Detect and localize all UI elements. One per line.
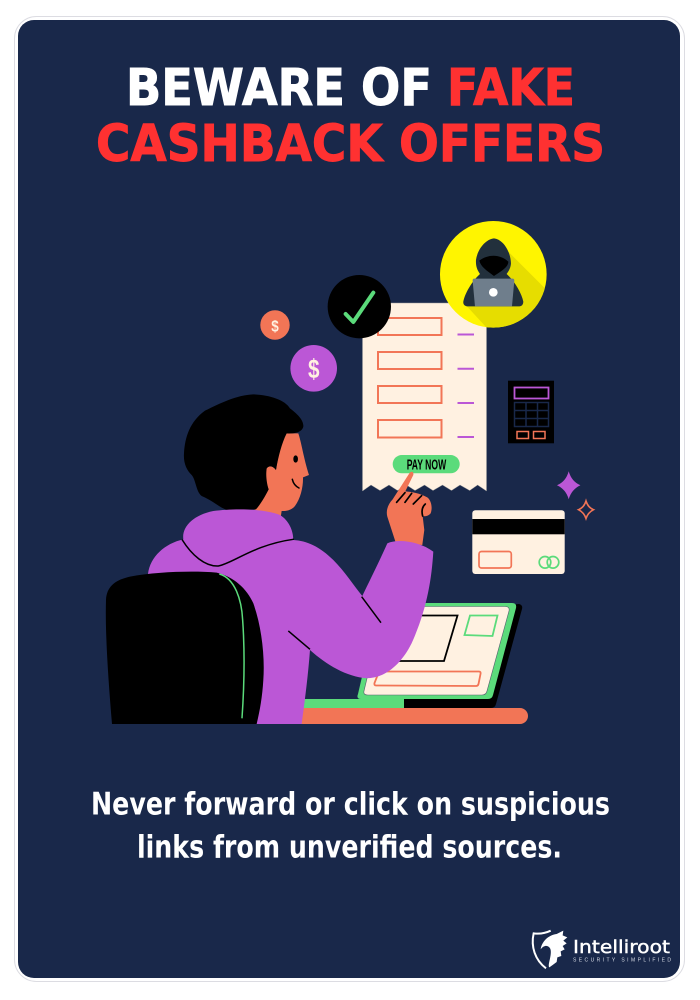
icon: large dollar coin — [290, 345, 337, 392]
icon: calculator — [508, 381, 554, 443]
icon: check badge — [328, 275, 391, 338]
icon: large dollar coin: $ — [308, 354, 320, 384]
title line 1 red: FAKE — [447, 59, 575, 118]
laptop red bar — [374, 672, 481, 686]
caption — [91, 786, 610, 866]
pay now button — [393, 455, 460, 473]
hand — [387, 472, 432, 545]
title line 1 white: BEWARE OF — [126, 59, 432, 118]
receipt amounts — [458, 334, 474, 437]
icon: eagle shield — [533, 931, 567, 968]
title line 2 red: CASHBACK OFFERS — [96, 115, 605, 174]
caption line 2: links from unverified sources. — [137, 830, 562, 866]
icon: small dollar coin — [260, 310, 290, 340]
person — [106, 394, 433, 724]
chair — [106, 572, 264, 724]
laptop green frame — [357, 603, 516, 699]
laptop screen — [364, 606, 509, 695]
orange tabletop — [295, 708, 528, 724]
logo tagline: SECURITY SIMPLIFIED — [573, 958, 671, 964]
hood line — [182, 539, 293, 566]
icon: small sparkle — [578, 501, 594, 518]
laptop — [357, 603, 522, 708]
logo name: Intelliroot — [573, 937, 670, 958]
logo — [533, 931, 671, 968]
caption line 1: Never forward or click on suspicious — [91, 786, 610, 822]
laptop shadow — [403, 604, 522, 708]
title — [96, 59, 605, 174]
receipt lines — [378, 318, 442, 438]
icon: hacker badge — [440, 221, 547, 328]
laptop green window — [464, 616, 498, 636]
receipt paper — [362, 303, 486, 491]
icon: credit card — [472, 510, 565, 574]
icon: large sparkle — [557, 471, 580, 499]
laptop black window — [395, 616, 458, 661]
chair green seam — [219, 574, 244, 718]
hoodie — [148, 509, 433, 724]
green base — [295, 699, 404, 708]
arm lines — [288, 597, 381, 649]
icon: small dollar coin: $ — [271, 318, 279, 335]
desk — [295, 699, 528, 724]
illustration — [106, 221, 594, 724]
eye — [293, 455, 298, 463]
receipt — [362, 303, 486, 491]
hair — [184, 394, 303, 510]
neck and face — [253, 433, 309, 517]
smile — [292, 479, 299, 488]
pay now button: PAY NOW — [407, 457, 446, 473]
finger lines — [397, 493, 425, 516]
